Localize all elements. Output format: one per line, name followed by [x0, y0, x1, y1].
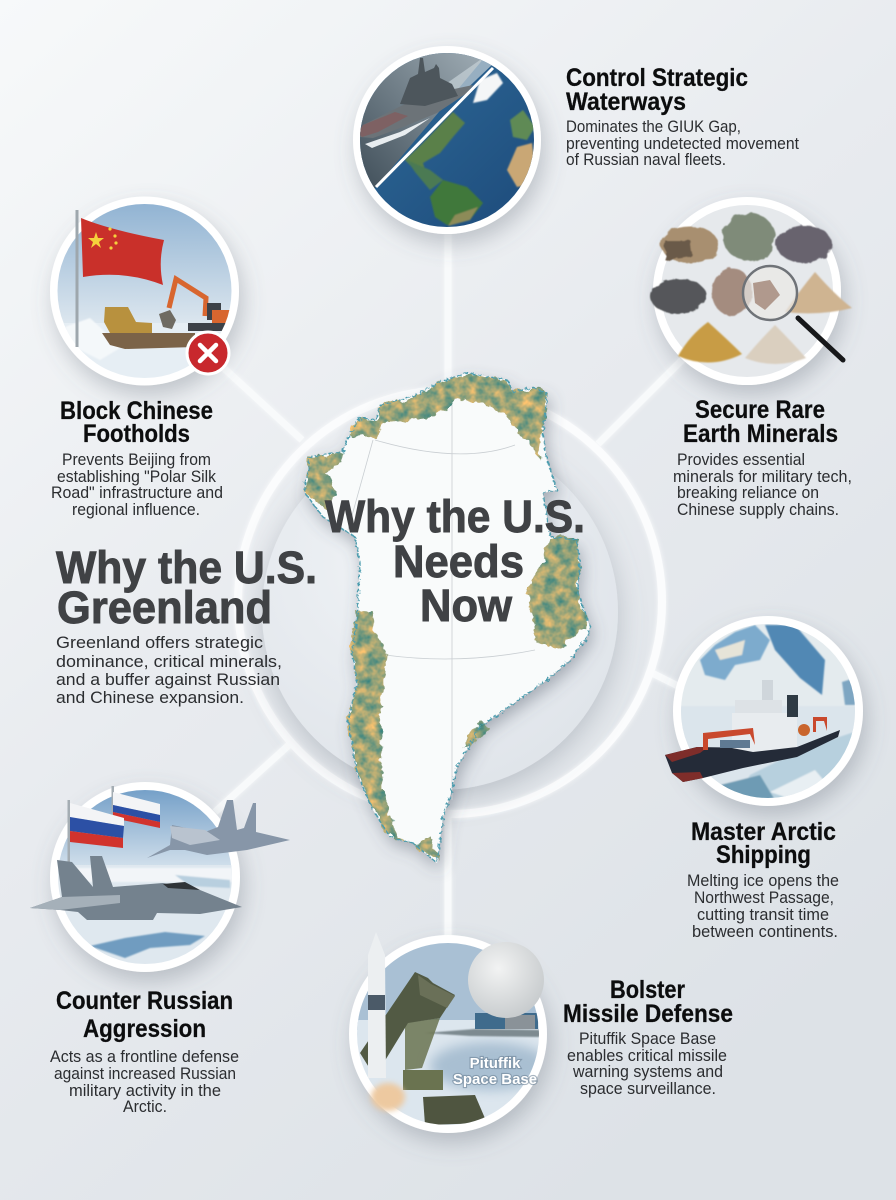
panel: bolster missile defense: [349, 932, 733, 1133]
panel: counter Russian aggression: [30, 782, 290, 1116]
jet upper: [147, 800, 290, 858]
heading: [60, 397, 213, 448]
description: Prevents Beijing from: [62, 451, 211, 469]
side title: Greenland: [57, 582, 272, 633]
description: Acts as a frontline defense: [50, 1048, 239, 1066]
photo circle: minerals and magnifier: [650, 197, 852, 385]
coastal land: [305, 373, 588, 862]
description: Pituffik Space Base: [579, 1030, 716, 1048]
description: enables critical missile: [567, 1047, 727, 1065]
central ring: [238, 390, 662, 814]
description: minerals for military tech,: [673, 468, 852, 486]
description: Chinese supply chains.: [677, 501, 839, 519]
description: preventing undetected movement: [566, 135, 799, 153]
description: Road" infrastructure and: [51, 484, 223, 502]
panel: block Chinese footholds: [50, 196, 240, 519]
heading: Block Chinese: [60, 397, 213, 425]
panel: control strategic waterways: [350, 45, 799, 234]
heading: Missile Defense: [563, 1000, 733, 1028]
panel: master Arctic shipping: [665, 616, 863, 941]
heading: Aggression: [83, 1015, 206, 1043]
description: warning systems and: [572, 1063, 723, 1081]
base label: Pituffik: [470, 1055, 521, 1072]
base label: [453, 1055, 537, 1088]
description: between continents.: [692, 923, 838, 941]
heading: Waterways: [566, 88, 686, 116]
description: [50, 1048, 239, 1116]
red X badge: [187, 332, 229, 374]
heading: [683, 396, 838, 448]
description: Northwest Passage,: [694, 889, 834, 907]
description: of Russian naval fleets.: [566, 151, 726, 169]
photo circle: flag and excavators: [50, 196, 240, 386]
magnifier: [743, 266, 797, 320]
side description: and a buffer against Russian: [56, 671, 280, 689]
description: [51, 451, 223, 519]
side description: dominance, critical minerals,: [56, 653, 282, 671]
center title: [325, 491, 585, 631]
description: [567, 1030, 727, 1098]
description: [673, 451, 852, 519]
heading: [563, 976, 733, 1028]
description: Provides essential: [677, 451, 805, 469]
central disc: [262, 434, 618, 790]
heading: Earth Minerals: [683, 420, 838, 448]
heading: [691, 818, 836, 869]
description: Melting ice opens the: [687, 872, 839, 890]
side description: and Chinese expansion.: [56, 689, 244, 707]
side description: Greenland offers strategic: [56, 634, 263, 652]
description: Arctic.: [123, 1098, 167, 1116]
description: establishing "Polar Silk: [57, 468, 217, 486]
photo circle: jets and Russian flags: [30, 782, 290, 972]
center title: Now: [420, 580, 513, 631]
heading: Shipping: [716, 841, 811, 869]
side description: [56, 634, 282, 707]
base label: Space Base: [453, 1071, 537, 1088]
description: breaking reliance on: [677, 484, 819, 502]
heading: Master Arctic: [691, 818, 836, 846]
description: Dominates the GIUK Gap,: [566, 118, 741, 136]
description: military activity in the: [69, 1082, 221, 1100]
photo circle: radar dome and missile launcher: [349, 932, 550, 1133]
description: space surveillance.: [580, 1080, 716, 1098]
heading: Counter Russian: [56, 987, 233, 1015]
center title: Needs: [393, 536, 524, 587]
side title: Why the U.S.: [56, 542, 317, 593]
description: cutting transit time: [697, 906, 829, 924]
heading: Bolster: [610, 976, 685, 1004]
heading: [566, 64, 748, 116]
photo circle: icebreaker: [665, 616, 863, 806]
description: regional influence.: [72, 501, 200, 519]
heading: [56, 987, 233, 1043]
heading: Control Strategic: [566, 64, 748, 92]
center title: Why the U.S.: [325, 491, 585, 542]
side title: [56, 542, 317, 633]
jet lower: [30, 856, 242, 920]
description: [687, 872, 839, 941]
description: [566, 118, 799, 169]
panel: secure rare earth minerals: [650, 197, 852, 519]
Greenland map: [305, 373, 590, 863]
connector lines: [215, 225, 690, 945]
photo circle: warship and Atlantic map: [350, 45, 541, 234]
heading: Footholds: [83, 420, 190, 448]
heading: Secure Rare: [695, 396, 825, 424]
description: against increased Russian: [54, 1065, 236, 1083]
